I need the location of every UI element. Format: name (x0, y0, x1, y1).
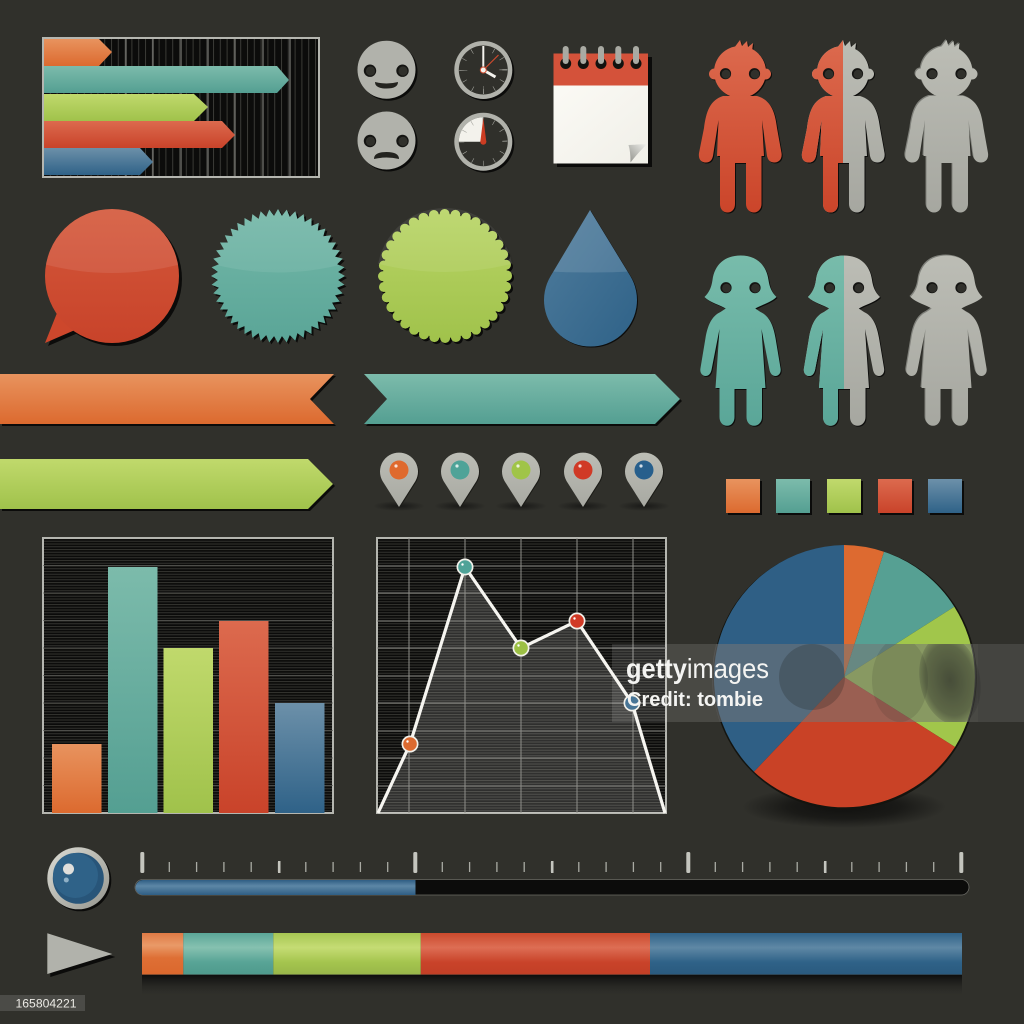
progress fill (136, 880, 416, 895)
swatch: green (827, 479, 861, 513)
water drop (540, 205, 640, 347)
image id label: 165804221 (16, 996, 77, 1010)
teal arrow bar (44, 66, 289, 93)
data point: teal (456, 558, 474, 576)
slice: orange (844, 545, 884, 677)
segment: teal (183, 933, 273, 974)
segment: green (273, 933, 421, 974)
spiral rings (560, 46, 642, 69)
watermark (612, 644, 1024, 722)
image id label (0, 995, 85, 1011)
area under line (378, 567, 665, 813)
icon: timer gauge (454, 113, 512, 171)
icon: clock (454, 41, 512, 99)
chart: pie chart (713, 545, 977, 828)
icon: calendar notepad (554, 46, 652, 167)
figure: grey girl (905, 254, 987, 426)
figure: grey boy (904, 39, 988, 212)
map pin: green (495, 453, 547, 511)
stacked bar (142, 933, 962, 996)
green bar (164, 648, 213, 813)
map pin: teal (434, 453, 486, 511)
speech bubble (40, 200, 185, 343)
segment: orange (142, 933, 183, 974)
teal bar (108, 567, 158, 813)
swatch: orange (726, 479, 760, 513)
starburst badge (211, 209, 347, 345)
pie shadow (742, 786, 946, 828)
red bar (219, 621, 268, 813)
watermark: Credit: tombie (627, 689, 763, 711)
data point: blue (624, 694, 640, 712)
chart: line chart (377, 538, 666, 813)
slice: teal (844, 552, 954, 677)
chart: vertical bar chart (43, 538, 333, 813)
icon: play triangle (47, 933, 112, 974)
slice: green (844, 607, 975, 747)
swatch: teal (776, 479, 810, 513)
icon: sad face (358, 112, 416, 170)
icon: happy face (358, 41, 416, 99)
figure: teal girl (700, 256, 781, 426)
ribbon: green (0, 459, 333, 509)
progress bar (135, 880, 969, 895)
blue arrow bar (44, 148, 153, 175)
blue bar (275, 703, 324, 813)
red arrow bar (44, 121, 235, 148)
green arrow bar (44, 94, 208, 121)
page curl (628, 144, 647, 162)
figure: red boy (699, 40, 782, 212)
swatch: blue (928, 479, 962, 513)
orange bar (52, 744, 102, 813)
map pin: orange (373, 453, 425, 511)
map pin: blue (618, 453, 670, 511)
data point: green (512, 640, 530, 656)
figure: half teal half grey girl (804, 256, 884, 426)
figure: half red half grey boy (802, 40, 885, 212)
data line (378, 567, 665, 813)
ribbon: teal (364, 374, 680, 424)
calendar header (554, 54, 648, 86)
scalloped badge (375, 205, 515, 338)
segment: red (421, 933, 650, 974)
stacked bar shadow (142, 975, 962, 996)
chart: horizontal arrow bar chart (43, 38, 319, 177)
slice: red (754, 677, 955, 807)
swatch: red (878, 479, 912, 513)
ribbon: orange (0, 374, 334, 424)
calendar page (554, 85, 648, 164)
data point: red (568, 612, 586, 630)
map pin: red (557, 453, 609, 511)
segment: blue (650, 933, 962, 974)
data point: orange (402, 736, 418, 752)
watermark: gettyimages (626, 653, 769, 684)
slider tick scale (140, 852, 963, 873)
progress slider knob (47, 847, 109, 909)
slice: blue (714, 545, 844, 772)
orange arrow bar (44, 39, 112, 66)
